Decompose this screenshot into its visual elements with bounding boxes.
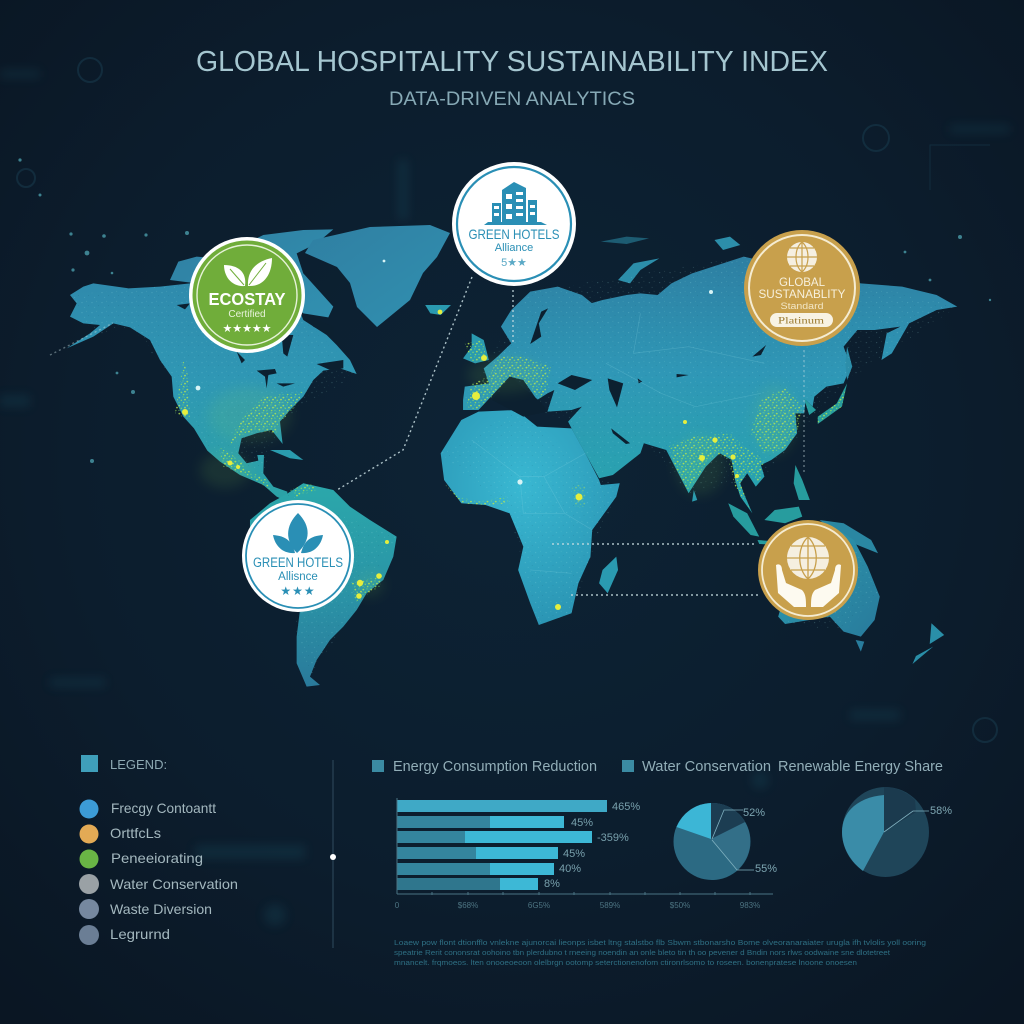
islands: Iceland, Britain, Madagascar, Sri Lanka (425, 305, 697, 593)
bright white hubs (196, 260, 713, 485)
islands: Japan and South East Asia (728, 383, 847, 545)
inland seas (492, 308, 766, 444)
bar 3 (397, 831, 629, 844)
badge: Global Sustainability Standard Platinum: SUSTANABLITY (758, 287, 846, 301)
icon: leaves (224, 258, 272, 286)
city lights underlay (200, 357, 797, 597)
badge sublabel: Alliance (495, 242, 533, 254)
axis: 0 (395, 901, 400, 910)
island: New Guinea (820, 520, 878, 553)
pie chart 2 (842, 787, 952, 877)
pie label: 52% (743, 807, 765, 819)
legend item: waste: Waste Diversion (110, 901, 212, 917)
chart header legend: Renewable Energy Share (778, 758, 943, 775)
city lights: Eurasia and Africa (444, 340, 847, 510)
bar 1 (397, 800, 640, 813)
legend item: energy: Frecgy Contoantt (111, 800, 216, 816)
continent: Australia (778, 527, 880, 652)
icon: globe (787, 242, 817, 272)
badge: hands holding globe (758, 520, 858, 620)
badge pill: Platinum (778, 316, 825, 326)
legend item: orange (80, 824, 161, 844)
axis: $50% (670, 901, 690, 910)
chart header legend: Energy Consumption Reduction (393, 758, 597, 775)
bright city dots (182, 310, 739, 610)
title: GLOBAL HOSPITALITY SUSTAINABILITY INDEX (196, 46, 828, 78)
axis: 589% (600, 901, 620, 910)
legend heading: LEGEND: (110, 757, 167, 772)
vertical divider (330, 760, 336, 948)
bar 4: 45% (563, 848, 585, 860)
bar 5 (397, 863, 581, 875)
badge name: ECOSTAY (208, 289, 286, 309)
city lights: Americas (175, 360, 383, 603)
legend item: green (80, 850, 203, 868)
badge sublabel: Allisnce (278, 571, 318, 583)
footnote text: Loaew pow flont dtionfflo vnlekne ajunorcai lieonps isbet ltng stalstbo flb Sbwm stbonarsho Bome olveoranaraiater urugla ifh tvlolis yoll ooring (394, 938, 926, 947)
continent: North America (67, 253, 357, 502)
legend item: energy (80, 800, 216, 818)
bar 2 (397, 816, 593, 829)
pie chart 1 (674, 803, 777, 880)
badge name: GLOBAL (779, 277, 826, 289)
footnote text: mnancelt. frqmoeos. lten onooeoeoon olelbrgn ootomp seterctionenofom ctironrlsomo to roseen. bonenpratese lnoone onoesen (394, 958, 857, 967)
continent: Greenland (305, 225, 450, 327)
arctic and Asian islands (601, 237, 852, 380)
legend item: green: Peneeiorating (111, 850, 203, 866)
islands: New Zealand (912, 623, 944, 664)
axis: $68% (458, 901, 478, 910)
badge stars: 5★★ (501, 257, 527, 269)
bar 6 (397, 878, 560, 890)
faint borders (472, 313, 764, 573)
icon: lotus leaves (273, 513, 323, 553)
legend (79, 755, 238, 945)
bar 3: -359% (597, 832, 629, 844)
arctic islands (170, 229, 333, 317)
legend item: background (79, 925, 170, 945)
pie label: 58% (930, 805, 952, 817)
axis: 6G5% (528, 901, 550, 910)
icon: globe (787, 537, 829, 579)
legend marker (81, 755, 98, 772)
legend item: background: Legrurnd (110, 926, 170, 942)
badge: Green Hotels Alliance 5 stars (452, 162, 576, 286)
bar 2: 45% (571, 817, 593, 829)
subtitle: DATA-DRIVEN ANALYTICS (389, 89, 635, 110)
icon: hands (776, 564, 841, 607)
footnote text: speatrie Rerit cononsrat oohoino tbn plerdubno t rneeing noendin an onle bleto tin th oo pevener d Bndin nors rlws oodwaine sne dlotetreet (394, 948, 891, 957)
footnote text (394, 938, 926, 967)
badge: EcoStay certified (189, 237, 305, 353)
badge sublabel: Certified (228, 309, 266, 320)
connector dotted lines (50, 277, 804, 595)
bar 1: 465% (612, 801, 640, 813)
chart header legend (372, 758, 943, 775)
bar 5: 40% (559, 863, 581, 875)
badge sublabel: Standard (780, 301, 824, 311)
badge: Green Hotels Alliance 3 stars (242, 500, 354, 612)
world map (50, 225, 957, 687)
legend item: orange: OrttfcLs (110, 825, 161, 841)
legend item: water: Water Conservation (110, 876, 238, 892)
Hudson Bay, Great Lakes and Gulf of St Lawrence (177, 303, 343, 460)
badge: Global Sustainability Standard Platinum (744, 230, 860, 346)
map texture (70, 257, 957, 677)
badge stars: ★★★ (280, 584, 316, 598)
pie label: 55% (755, 863, 777, 875)
axis (395, 798, 773, 910)
continent: Africa (441, 410, 620, 625)
continent: South America (250, 483, 397, 687)
chart header legend: Water Conservation (642, 758, 771, 775)
axis: 983% (740, 901, 760, 910)
badge stars: ★★★★★ (222, 323, 272, 335)
badge name: GREEN HOTELS (253, 555, 343, 570)
bar chart (395, 798, 773, 910)
bar 4 (397, 847, 585, 860)
bar 6: 8% (544, 878, 560, 890)
legend item: water (79, 874, 238, 894)
continent: Eurasia (463, 257, 957, 513)
badge name: GREEN HOTELS (468, 226, 560, 242)
legend item: waste (79, 899, 212, 919)
icon: hotel buildings (484, 182, 547, 225)
